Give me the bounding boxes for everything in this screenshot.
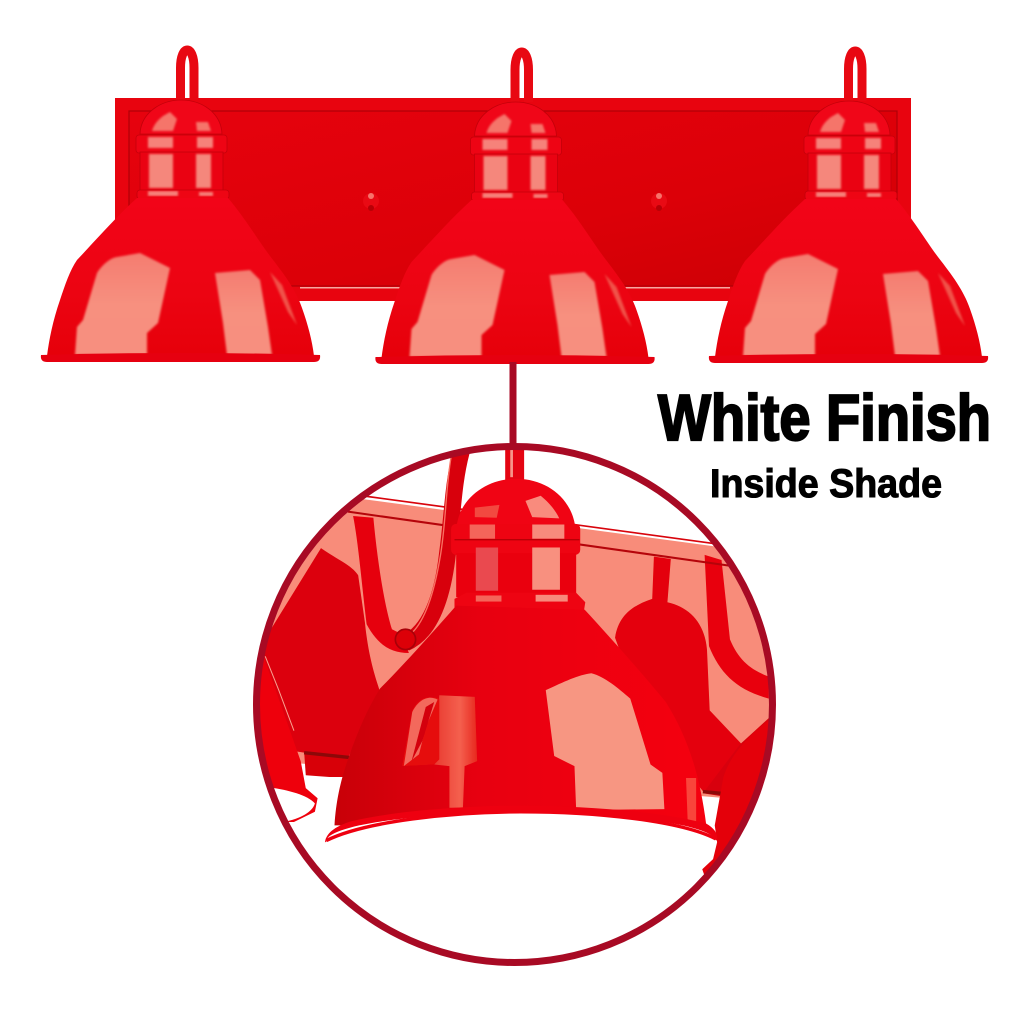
fixture cap and neck <box>451 479 585 611</box>
zoom circle outline <box>256 446 772 962</box>
backplate <box>115 98 911 301</box>
white interior of shade <box>325 807 717 842</box>
lamp shade right <box>709 51 988 363</box>
subheading: Inside Shade <box>710 462 942 506</box>
gooseneck arm <box>395 452 461 650</box>
lamp shade left <box>41 50 320 362</box>
connector line <box>510 362 516 446</box>
backplate close-up <box>264 496 769 798</box>
right neighbouring shade <box>702 721 768 874</box>
lamp shade centre <box>375 52 655 364</box>
zoom circle detail <box>250 446 791 962</box>
mounting screw left <box>363 193 379 211</box>
shade close-up <box>334 606 706 825</box>
top stem <box>505 447 524 481</box>
mounting screw right <box>651 193 667 211</box>
left neighbouring shade <box>260 656 318 822</box>
